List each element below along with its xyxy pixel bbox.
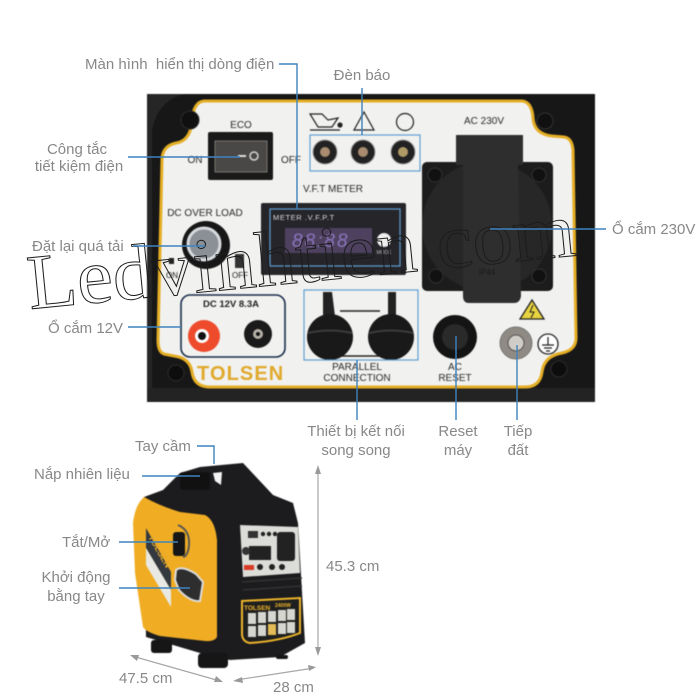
label: handle — [135, 438, 214, 464]
label: 230V outlet: Ổ cắm 230V — [612, 220, 695, 238]
label: display: Màn hình hiển thị dòng điện — [85, 56, 274, 73]
DC overload knob — [166, 208, 248, 280]
label: overload reset: Đặt lại quá tải — [32, 238, 124, 255]
generator illustration — [133, 463, 305, 668]
DC overload knob: ON — [166, 271, 178, 280]
label: indicator lights — [334, 67, 390, 135]
label: 12V outlet — [48, 319, 181, 337]
V.F.T meter: METER .V.F.P.T — [273, 213, 335, 222]
V.F.T meter — [261, 184, 406, 275]
ECO switch: ON — [188, 155, 202, 166]
DC 12V outlet: DC 12V 8.3A — [203, 299, 259, 310]
ground terminal — [500, 327, 558, 359]
label: manual start — [41, 569, 190, 605]
highlight boxes — [270, 135, 420, 360]
label: ground — [504, 345, 532, 459]
label: fuel cap: Nắp nhiên liệu — [34, 466, 130, 483]
yellow side shell — [133, 497, 217, 641]
label: 12V outlet: Ổ cắm 12V — [48, 319, 123, 337]
label: eco switch: tiết kiệm điện — [35, 158, 123, 175]
AC 230V socket: IP44 — [479, 268, 496, 277]
label: manual start: bằng tay — [47, 588, 105, 605]
dimension: height — [315, 465, 379, 656]
rubber feet — [151, 640, 288, 668]
feature plate — [242, 598, 300, 643]
side brand label: TOLSEN — [146, 533, 173, 569]
label: machine reset — [438, 336, 478, 459]
V.F.T meter: MODE — [376, 250, 392, 256]
watermark: Ledvinhtien.com — [23, 186, 579, 326]
parallel connection caps: CONNECTION — [323, 373, 391, 384]
ECO switch — [188, 120, 301, 180]
label: parallel connection — [307, 360, 405, 459]
on/off switch — [173, 525, 189, 557]
label: on/off — [62, 534, 178, 551]
AC reset button: RESET — [438, 373, 472, 384]
ECO switch: OFF — [281, 155, 301, 166]
DC overload knob: DC OVER LOAD — [167, 208, 243, 219]
label: machine reset: Reset — [438, 423, 478, 440]
recoil starter — [175, 568, 203, 601]
handle opening — [213, 472, 222, 485]
front control panel — [240, 525, 300, 577]
AC 230V socket — [422, 116, 553, 303]
panel: control panel photo — [147, 94, 595, 402]
dimension: width — [233, 665, 316, 696]
vent slots — [242, 578, 302, 590]
label: ground: đất — [508, 442, 529, 459]
label: parallel connection: Thiết bị kết nối — [307, 423, 405, 440]
label: eco switch: Công tắc — [47, 141, 108, 158]
TOLSEN logo: TOLSEN — [197, 363, 284, 385]
dimension: height: 45.3 cm — [326, 558, 379, 575]
fuel cap — [180, 472, 210, 490]
label: eco switch — [35, 141, 240, 175]
indicator lights — [313, 140, 415, 164]
label: display — [85, 56, 297, 209]
feature plate: TOLSEN — [244, 605, 271, 612]
label: handle: Tay cầm — [135, 438, 191, 455]
label: parallel connection: song song — [321, 442, 391, 459]
DC overload knob: OFF — [232, 271, 248, 280]
parallel connection caps — [307, 292, 414, 384]
DC 12V outlet — [181, 295, 285, 357]
warning icons — [310, 112, 414, 130]
AC reset button — [433, 315, 477, 384]
dimension: width: 28 cm — [273, 679, 314, 696]
generator body — [144, 463, 305, 660]
AC 230V socket: AC 230V — [464, 116, 504, 127]
dimension: length — [119, 655, 223, 687]
label: manual start: Khởi động — [41, 569, 111, 586]
V.F.T meter: V.F.T METER — [303, 184, 363, 195]
hazard triangle — [520, 300, 544, 319]
label: on/off: Tắt/Mở — [62, 534, 110, 551]
label: ground: Tiếp — [504, 423, 532, 440]
dimension: length: 47.5 cm — [119, 670, 172, 687]
feature plate: 2400W — [275, 603, 291, 609]
ECO switch: ECO — [230, 120, 252, 131]
label: machine reset: máy — [444, 442, 473, 459]
side brand label — [146, 528, 173, 607]
label: indicator lights: Đèn báo — [334, 67, 390, 84]
AC reset button: AC — [448, 362, 462, 373]
parallel connection caps: PARALLEL — [332, 362, 382, 373]
V.F.T meter: 88:88 — [292, 231, 350, 252]
